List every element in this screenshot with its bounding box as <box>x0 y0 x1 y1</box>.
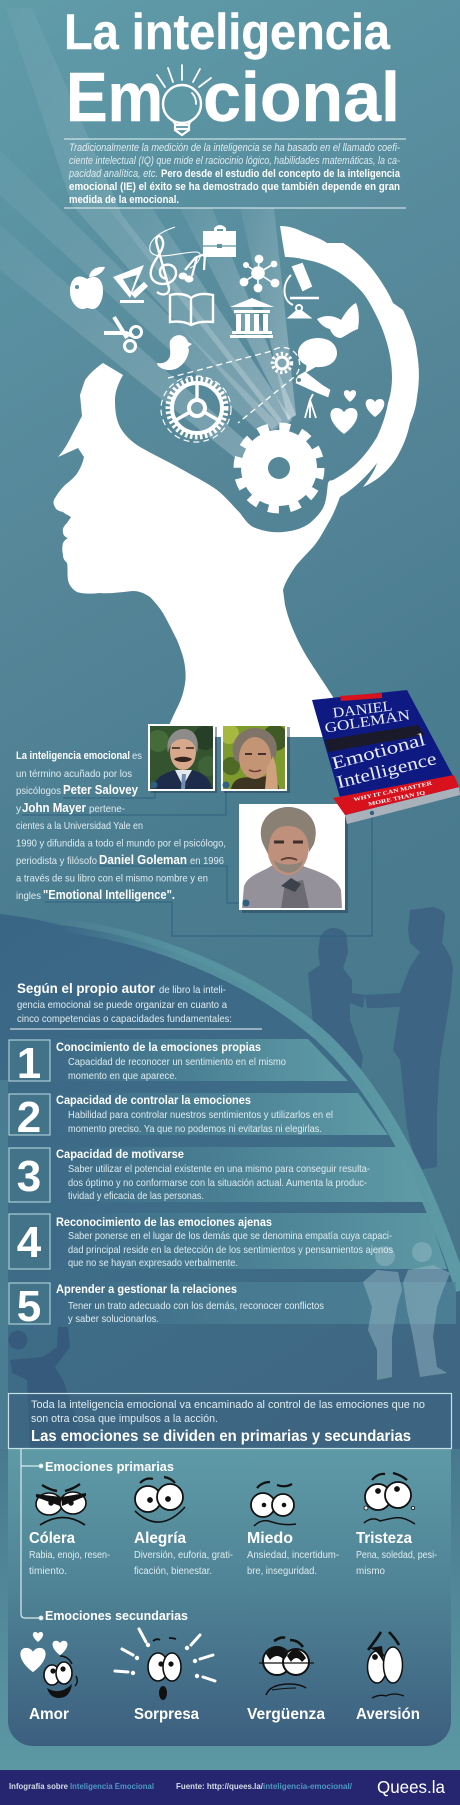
icon: microscope <box>284 264 319 318</box>
competency 2: Capacidad de controlar la emociones <box>56 1093 251 1107</box>
face: vergüenza <box>259 1637 314 1695</box>
photo: John Mayer <box>219 724 290 793</box>
emotions summary box <box>8 1394 452 1448</box>
competency 4 <box>9 1214 393 1269</box>
head silhouette <box>54 226 419 737</box>
connector lines <box>22 785 372 936</box>
intro about emotional intelligence text <box>16 750 226 902</box>
emotions summary box: Las emociones se dividen en primarias y secundarias <box>31 1428 411 1445</box>
label: tristeza: mismo <box>356 1566 385 1577</box>
icon: butterfly <box>317 303 359 338</box>
icon: bird <box>157 335 192 370</box>
footer: inteligencia-emocional/ <box>263 1781 353 1791</box>
intro rule top <box>64 138 406 140</box>
intro paragraph <box>68 142 401 206</box>
intro rule bottom <box>64 207 406 209</box>
intro paragraph: pacidad analítica, etc. <box>68 168 158 180</box>
competency 5 <box>9 1282 324 1331</box>
icon: small heart <box>344 390 356 402</box>
competency 1: momento en que aparece. <box>68 1071 177 1082</box>
icon: telescope <box>296 372 330 418</box>
light rays <box>0 8 296 470</box>
intro about emotional intelligence text: psicólogos <box>16 785 61 797</box>
competency 1: 1 <box>17 1039 41 1088</box>
silhouette: woman shaking hands <box>308 928 365 1075</box>
intro about emotional intelligence text: Daniel Goleman <box>99 852 187 867</box>
competency 2: momento preciso. Ya que no podemos ni evitarlas ni elegirlas. <box>68 1124 322 1135</box>
label: sorpresa: Sorpresa <box>134 1706 199 1723</box>
label: cólera <box>29 1530 110 1577</box>
emotions tree connector <box>21 1449 43 1620</box>
face: miedo <box>251 1482 296 1526</box>
footer: Infografía sobre <box>9 1781 68 1791</box>
label: cólera: timiento. <box>29 1566 67 1577</box>
icon: medium heart <box>366 399 384 417</box>
competencies intro text: gencia emocional se puede organizar en cuanto a <box>17 999 227 1011</box>
emotions summary box: Toda la inteligencia emocional va encaminado al control de las emociones que no <box>31 1399 425 1411</box>
intro about emotional intelligence text: "Emotional Intelligence". <box>43 887 175 902</box>
book cover: WHY IT CAN MATTER <box>353 780 434 803</box>
face: tristeza <box>364 1473 415 1524</box>
icon: speech bubble <box>298 338 337 373</box>
icon: open book <box>170 294 213 325</box>
competency 2 <box>9 1093 333 1142</box>
intro about emotional intelligence text: y <box>16 803 22 815</box>
photo: Daniel Goleman <box>239 804 348 913</box>
icon: ruler and pencil <box>113 265 146 303</box>
label: aversión: Aversión <box>356 1706 420 1723</box>
title: cional <box>203 58 400 136</box>
competency 5: y saber solucionarlos. <box>68 1314 159 1325</box>
label: miedo: Ansiedad, incertidum- <box>247 1550 339 1561</box>
competency 3: Saber utilizar el potencial existente en una mismo para conseguir resulta- <box>68 1164 370 1175</box>
icon: light bulb <box>157 65 211 135</box>
intro about emotional intelligence text: ingles <box>16 890 41 902</box>
label: cólera: Rabia, enojo, resen- <box>29 1550 110 1561</box>
icon: molecule <box>240 255 279 292</box>
label: miedo: Miedo <box>247 1530 293 1547</box>
face: cólera <box>36 1484 86 1525</box>
competency 2: Habilidad para controlar nuestros sentimientos y utilizarlos en el <box>68 1110 333 1121</box>
label: alegría: Alegría <box>134 1530 186 1547</box>
competency 5: Aprender a gestionar la relaciones <box>56 1282 237 1296</box>
intro paragraph: Pero desde el estudio del concepto de la inteligencia <box>161 168 401 180</box>
competency 1 <box>9 1039 286 1088</box>
icon: treble clef and music swirl <box>150 227 205 294</box>
label: amor: Amor <box>29 1706 69 1723</box>
heading: emociones secundarias: Emociones secundarias <box>45 1609 188 1623</box>
intro paragraph: Tradicionalmente la medición de la inteligencia se ha basado en el llamado coefi- <box>69 142 400 154</box>
bar backgrounds <box>52 1039 456 1324</box>
label: miedo: bre, inseguridad. <box>247 1566 317 1577</box>
silhouette: man shaking hands <box>365 907 453 1170</box>
footer: Quees.la <box>377 1777 445 1797</box>
footer: Fuente: http://quees.la/ <box>176 1781 264 1791</box>
icon: apple <box>70 267 105 309</box>
competency 4: dad principal reside en la detección de los sentimientos y pensamientos ajenos <box>68 1245 393 1256</box>
heading: emociones primarias: Emociones primarias <box>45 1460 174 1474</box>
title: La inteligencia <box>64 4 391 60</box>
competency 4: Reconocimiento de las emociones ajenas <box>56 1215 272 1229</box>
emotions summary box: son otra cosa que impulsos a la acción. <box>31 1413 218 1425</box>
book cover: GOLEMAN <box>324 707 412 737</box>
book cover <box>312 690 460 824</box>
competencies rule <box>10 1028 262 1030</box>
book cover: Emotional <box>329 729 427 773</box>
label: miedo <box>247 1530 339 1577</box>
competencies intro text: cinco competencias o capacidades fundamentales: <box>17 1013 232 1025</box>
face: aversión <box>368 1632 404 1698</box>
footer <box>0 1770 460 1805</box>
book cover: DANIEL <box>332 698 393 722</box>
competency 3: 3 <box>17 1152 41 1201</box>
curved dark section <box>0 914 460 1460</box>
intro about emotional intelligence text: a través de su libro con el mismo nombre y en <box>16 872 208 884</box>
competency 5: Tener un trato adecuado con los demás, reconocer conflictos <box>68 1301 324 1312</box>
competency 4: que no se hayan expresado verbalmente. <box>68 1258 238 1269</box>
competency 3: dos óptimo y no conformarse con la situación actual. Aumenta la produc- <box>68 1178 367 1189</box>
label: vergüenza: Vergüenza <box>247 1706 325 1723</box>
intro about emotional intelligence text: 1990 y difundida a todo el mundo por el psicólogo, <box>16 838 226 850</box>
competencies intro text: de libro la inteli- <box>159 984 226 996</box>
intro paragraph: emocional (IE) el éxito se ha demostrado que también depende en gran <box>69 181 400 193</box>
competency 5: 5 <box>17 1282 41 1331</box>
intro about emotional intelligence text: es <box>132 750 142 762</box>
competencies intro text <box>17 980 232 1025</box>
silhouette: man with raised hand <box>8 1327 87 1449</box>
competencies intro text: Según el propio autor <box>17 980 156 996</box>
intro paragraph: medida de la emocional. <box>69 194 179 206</box>
lower outer background <box>0 1449 460 1770</box>
intro about emotional intelligence text: en 1996 <box>190 855 224 867</box>
intro about emotional intelligence text: periodista y filósofo <box>16 855 97 867</box>
icon: tiny gear with zoom lines <box>168 347 300 423</box>
icon: scissors <box>104 317 142 352</box>
icon: big gear <box>238 427 320 509</box>
silhouette: pale man <box>403 1242 450 1377</box>
competency 1: Conocimiento de la emociones propias <box>56 1040 261 1054</box>
icon: briefcase <box>203 225 236 257</box>
intro about emotional intelligence text: La inteligencia emocional <box>16 750 130 762</box>
footer: Inteligencia Emocional <box>70 1781 154 1791</box>
face: sorpresa <box>115 1629 215 1700</box>
competency 3: tividad y eficacia de las personas. <box>68 1191 204 1202</box>
emotions panel <box>8 1449 451 1746</box>
label: cólera: Cólera <box>29 1530 75 1547</box>
intro paragraph: ciente intelectual (IQ) que mide el raciocinio lógico, habilidades matemáticas, la ca- <box>69 155 400 167</box>
intro about emotional intelligence text: un término acuñado por los <box>16 768 132 780</box>
label: tristeza: Pena, soledad, pesi- <box>356 1550 437 1561</box>
intro about emotional intelligence text: John Mayer <box>22 800 86 815</box>
title <box>64 4 400 136</box>
label: alegría: Diversión, euforia, grati- <box>134 1550 233 1561</box>
label: alegría <box>134 1530 233 1577</box>
face: amor <box>20 1632 77 1698</box>
book cover: MORE THAN IQ <box>368 790 427 808</box>
photo: Peter Salovey <box>147 724 218 793</box>
silhouette: pale woman <box>363 1246 402 1380</box>
competency 2: 2 <box>17 1093 41 1142</box>
title: Em <box>66 58 163 136</box>
icon: big heart <box>330 408 358 434</box>
intro about emotional intelligence text: cientes a la Universidad Yale en <box>16 820 143 832</box>
label: tristeza <box>356 1530 437 1577</box>
curved teal band <box>60 925 460 1290</box>
competency 3: Capacidad de motivarse <box>56 1147 184 1161</box>
competency 4: Saber ponerse en el lugar de los demás que se denomina empatía cuya capaci- <box>68 1231 392 1242</box>
competency 3 <box>9 1147 370 1202</box>
competency 1: Capacidad de reconocer un sentimiento en el mismo <box>68 1057 286 1068</box>
face: alegría <box>135 1477 185 1522</box>
label: alegría: ficación, bienestar. <box>134 1566 212 1577</box>
competency 4: 4 <box>17 1218 42 1267</box>
icon: temple <box>230 298 274 338</box>
intro about emotional intelligence text: Peter Salovey <box>63 782 139 797</box>
book cover: Intelligence <box>335 748 438 792</box>
icon: small gear <box>161 376 231 442</box>
intro about emotional intelligence text: pertene- <box>89 803 125 815</box>
label: tristeza: Tristeza <box>356 1530 412 1547</box>
left edge tint <box>0 1080 8 1450</box>
